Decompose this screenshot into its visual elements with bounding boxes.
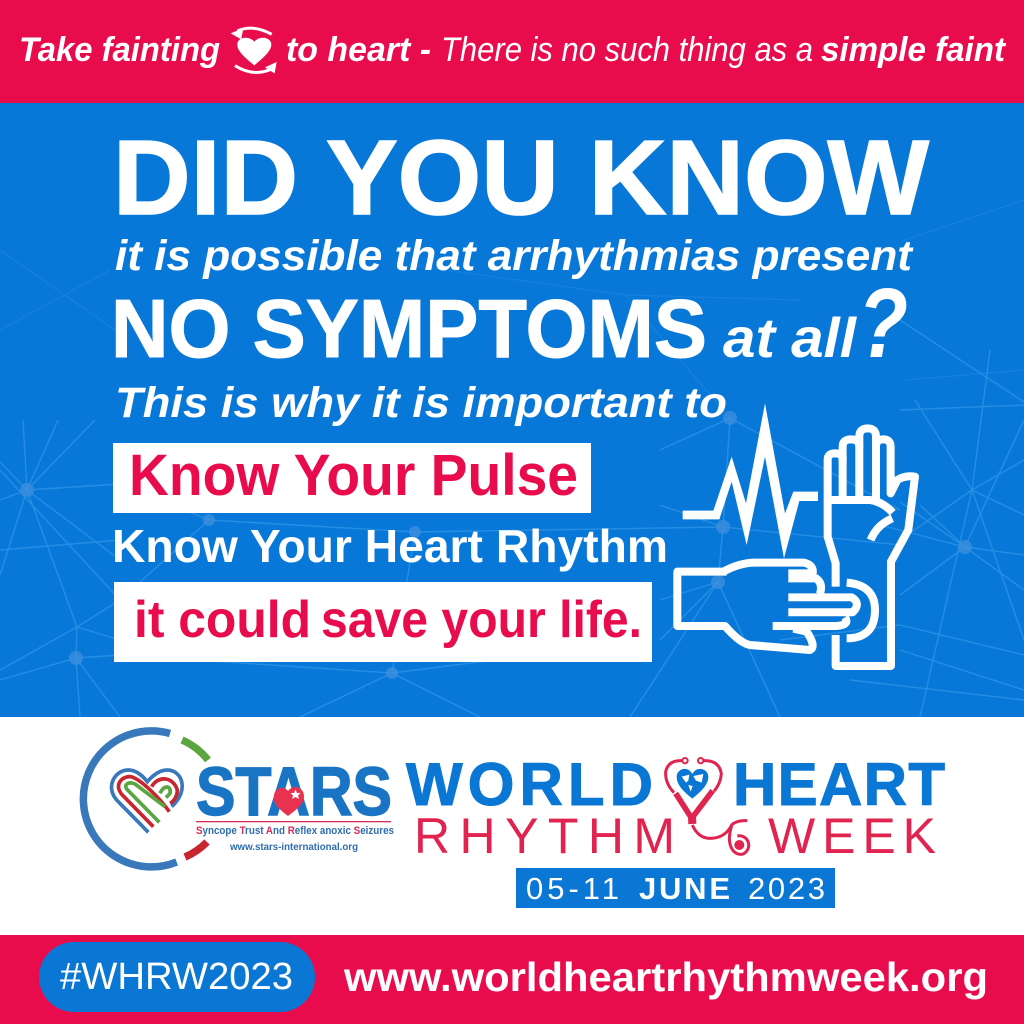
logo: world heart rhythm week	[406, 751, 945, 908]
callout: know your pulse: Know Your Pulse	[129, 443, 578, 508]
date badge: 2023	[748, 871, 825, 906]
callout: it could save your life	[114, 582, 652, 662]
icon: raised hand	[828, 428, 915, 666]
wordmark: rhythm: RHYTHM	[414, 808, 675, 864]
date badge: JUNE	[639, 871, 730, 906]
text: this is why: This is why it is important to	[115, 379, 727, 427]
website url: www.worldheartrhythmweek.org	[343, 954, 988, 1000]
heading: no symptoms: NO SYMPTOMS	[111, 282, 707, 375]
icon: pulse arc	[847, 583, 875, 638]
panel: top banner	[0, 0, 1024, 103]
logo heart stripes	[112, 770, 182, 832]
banner text: there is no such thing: There is no such thing as a	[441, 31, 813, 69]
icon: stethoscope with globe heart	[666, 758, 749, 854]
icon: hand creases	[830, 445, 893, 540]
heading: did you know: DID YOU KNOW	[113, 119, 929, 237]
icon: heart with circular arrows	[231, 28, 277, 73]
banner text: to heart: to heart -	[286, 31, 431, 69]
wordmark: week: WEEK	[768, 808, 936, 864]
hashtag pill: #WHRW2023	[60, 956, 293, 998]
callout: it could save your life: it could	[134, 591, 311, 649]
callout: it could save your life: save your life.	[321, 591, 642, 649]
banner text: take fainting: Take fainting	[19, 31, 220, 69]
text: question mark: ?	[858, 268, 908, 378]
logo wordmark: STARS	[196, 753, 392, 830]
panel: blue main message	[0, 103, 1024, 717]
text: arrhythmias present: it is possible that arrhythmias present	[115, 232, 914, 280]
icon: pressing hand	[677, 563, 857, 650]
logo ring	[83, 731, 208, 867]
logo url: www.stars-international.org	[229, 842, 358, 853]
icon: pulse line	[683, 403, 818, 558]
wordmark: world: WORLD	[406, 751, 653, 818]
panel: white logo band	[0, 717, 1024, 935]
date badge	[516, 868, 835, 908]
panel: bottom banner	[0, 935, 1024, 1024]
logo: stars	[83, 731, 394, 867]
wordmark: heart: HEART	[733, 751, 945, 818]
text: know your heart rhythm: Know Your Heart Rhythm	[112, 520, 668, 572]
banner text: simple faint: simple faint	[821, 31, 1007, 69]
logo tagline: Syncope Trust And Reflex anoxic Seizures	[196, 825, 394, 837]
logo heart with star	[274, 787, 304, 816]
text: at all: at all	[723, 306, 857, 369]
date badge: 05-11	[526, 871, 619, 906]
icon: pulse check hands	[677, 403, 915, 666]
hashtag pill	[39, 942, 315, 1012]
